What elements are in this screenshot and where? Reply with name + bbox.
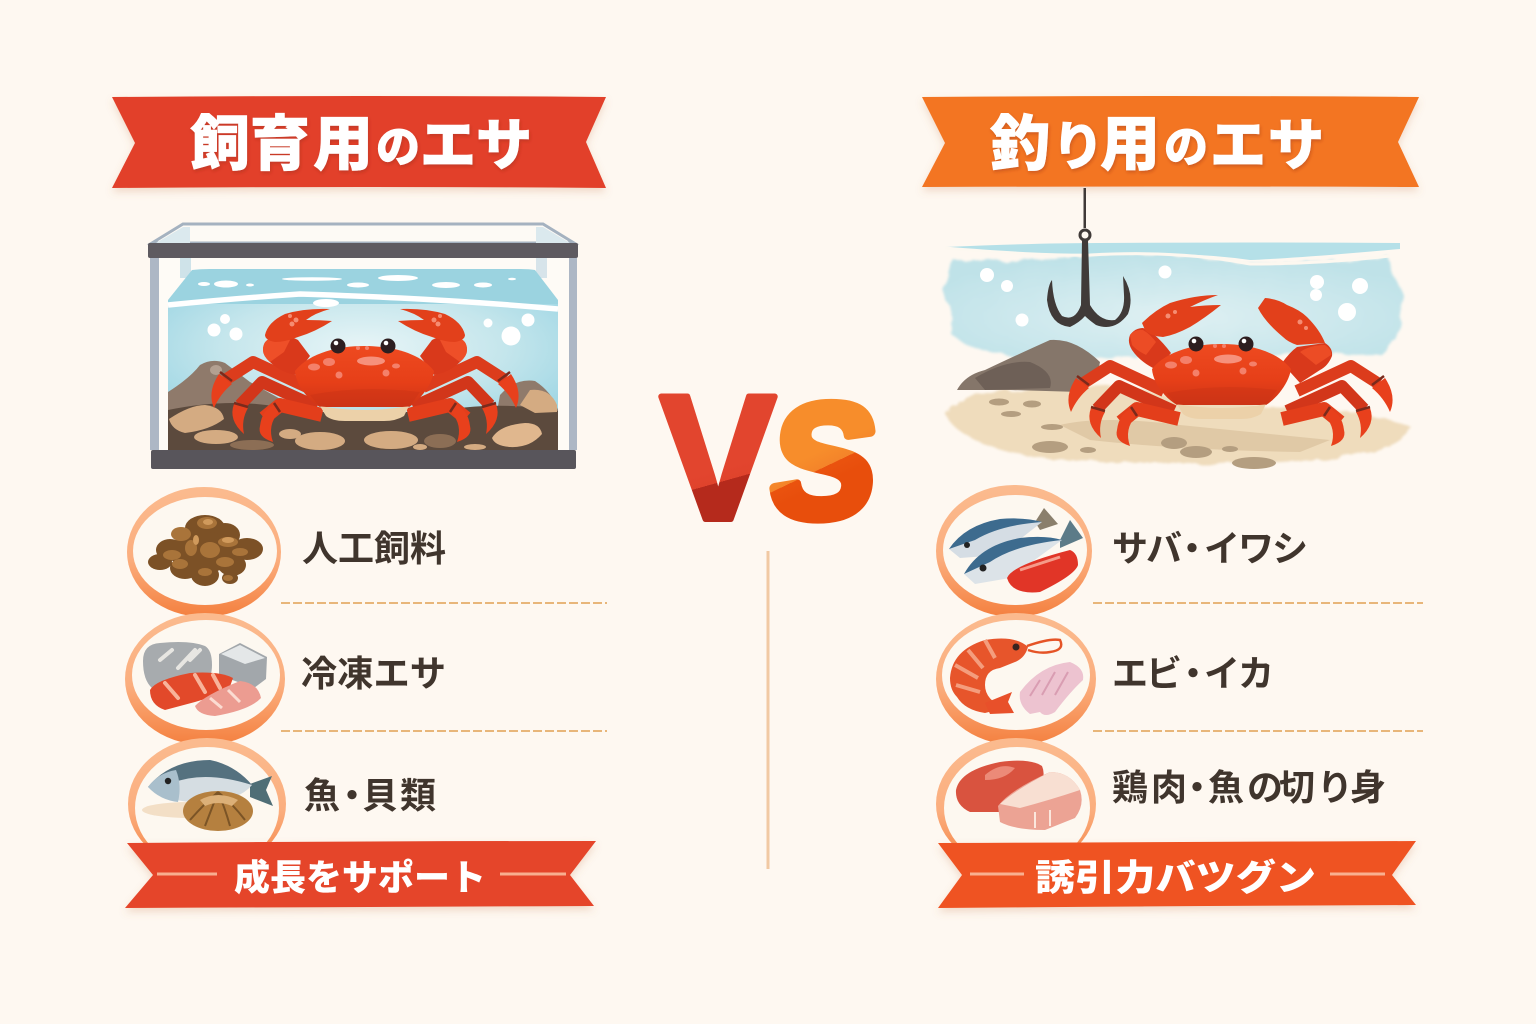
food icon: fish and shellfish	[128, 738, 286, 870]
heading banner: fishing bait: エサ	[1210, 114, 1324, 177]
footer banner: outstanding attraction: 誘引力バツグン	[1035, 857, 1316, 898]
row text: mackerel and sardine: サバ・イワシ	[1112, 528, 1308, 569]
row text: chicken and fish fillets: 鶏肉・魚の切り身	[1112, 767, 1386, 808]
food icon: frozen feed	[125, 613, 285, 745]
heading banner: rearing feed	[112, 96, 606, 188]
footer banner: outstanding attraction	[938, 841, 1416, 908]
food icon: mackerel and sardine	[936, 485, 1092, 617]
heading banner: fishing bait: り	[1052, 119, 1104, 177]
row text: artificial feed: 人工飼料	[302, 528, 446, 569]
heading banner: fishing bait	[922, 96, 1419, 187]
food icon: chicken and fish fillets	[936, 738, 1096, 870]
food icon: shrimp and squid	[936, 613, 1096, 745]
decorative-row dividers	[281, 603, 607, 731]
row text: frozen feed: 冷凍エサ	[301, 653, 446, 694]
center divider line	[766, 551, 770, 869]
row text: fish and shellfish: 魚・貝類	[304, 775, 436, 816]
illustration: crab on seabed with hook	[944, 188, 1412, 469]
heading banner: rearing feed: エサ	[420, 114, 532, 177]
heading banner: fishing bait: の	[1164, 123, 1208, 172]
footer banner: supports growth: 成長をサポート	[234, 857, 486, 898]
heading banner: fishing bait: 釣	[990, 111, 1050, 178]
heading banner: rearing feed: の	[376, 123, 420, 172]
row text: shrimp and squid: エビ・イカ	[1112, 653, 1274, 694]
panel: feed for fishing	[922, 96, 1423, 908]
VS mark: S	[763, 371, 886, 552]
food icon: artificial pellets	[127, 487, 281, 617]
panel: feed for rearing	[112, 96, 607, 908]
VS mark	[660, 358, 886, 557]
illustration: crab in aquarium tank	[148, 224, 578, 469]
VS mark: V	[660, 358, 776, 557]
heading banner: rearing feed: 飼育用	[190, 111, 373, 178]
footer banner: supports growth	[125, 841, 596, 908]
heading banner: fishing bait: 用	[1100, 111, 1160, 178]
decorative-row dividers	[1093, 603, 1423, 731]
